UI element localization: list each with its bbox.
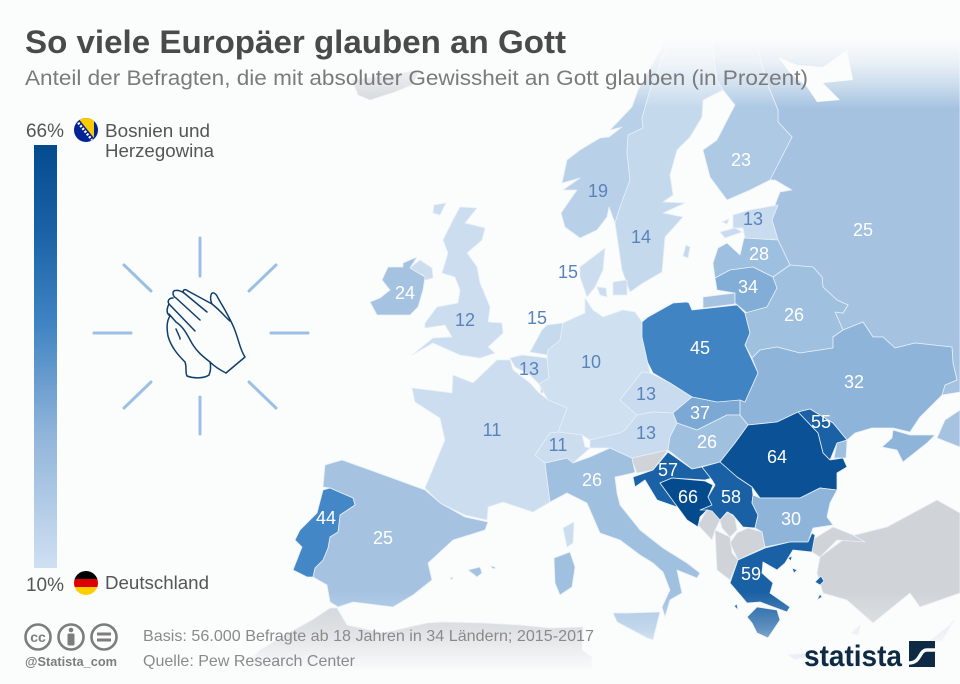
value: Netherlands: 15 [527,308,547,328]
Luxembourg [540,382,547,393]
Bosnia and Herzegovina [660,478,713,527]
Germany [539,298,650,440]
value: Ukraine: 32 [844,372,864,392]
value: Hungary: 26 [697,432,717,452]
legend: minimum value: 10% [26,575,64,596]
White Sea [778,50,853,102]
Bulgaria [752,488,837,547]
Latvia [713,238,790,278]
Sicily [613,612,660,640]
Estonia [720,205,778,240]
value: Germany: 10 [581,352,601,372]
icon: creative commons licence [26,624,116,650]
value: Sweden: 14 [631,227,651,247]
title: So viele Europäer glauben an Gott [25,24,566,60]
logo mark [909,641,935,667]
legend: Bosnia flag icon [74,118,98,142]
non-surveyed land: Turkey [812,500,960,623]
Crete [788,653,807,660]
legend: Bosnia label [105,121,215,161]
icon: no derivatives [92,624,116,650]
value: Switzerland: 11 [549,435,567,455]
subtitle: Anteil der Befragten, die mit absoluter Gewissheit an Gott glauben (in Prozent) [25,66,808,90]
Ukraine: Crimea [882,430,935,462]
value: Russia: 25 [853,220,873,240]
source note: base: Basis: 56.000 Befragte ab 18 Jahren in 34 Ländern; 2015-2017 [143,628,594,645]
non-surveyed land: Iceland [352,70,420,100]
value: Denmark: 15 [558,262,578,282]
value: Italy: 26 [582,470,602,490]
statista logo [804,640,935,673]
legend: Germany flag icon [74,571,98,595]
Slovakia [673,397,740,430]
legend: Bosnia label, line two: Herzegowina [105,141,215,161]
non-surveyed land: Cyprus and small islands [852,620,954,645]
Slovenia [632,450,668,473]
legend: maximum value: 66% [26,121,64,142]
Romania [720,412,847,498]
Gotland [683,245,690,258]
legend: Bosnia label, line one: Bosnien und [105,121,210,141]
France [412,360,567,520]
value: Norway: 19 [588,181,608,201]
value: Bosnia and Herzegovina: 66 [678,487,698,507]
value: Bulgaria: 30 [781,509,801,529]
Belgium [510,355,549,384]
Italy [545,448,700,617]
Balearic Islands [450,566,495,580]
value: Belarus: 26 [784,305,804,325]
Switzerland [535,432,590,463]
top fade of map [0,0,960,108]
Ukraine [740,322,957,440]
value: Belgium: 13 [519,359,539,379]
Greece [730,533,824,638]
legend [26,118,215,596]
value: Romania: 64 [767,447,787,467]
Finland [703,30,792,200]
Lithuania [715,267,777,313]
icon: radiating rays [94,238,308,434]
value: Portugal: 44 [316,508,336,528]
icon: CC: cc [30,629,46,645]
Ireland [370,257,425,315]
Russia [758,30,960,395]
Moldova [798,409,847,460]
value: Poland: 45 [690,338,710,358]
Croatia [633,452,712,527]
icon: attribution [58,624,84,650]
Czech Republic [620,372,692,415]
value: Czech Republic: 13 [636,384,656,404]
map of Europe [250,30,960,672]
value: United Kingdom: 12 [455,310,475,330]
Ukraine: Bessarabia [834,440,847,458]
value: Austria: 13 [636,423,656,443]
Sardinia [554,552,575,595]
twitter handle: @Statista_com [25,655,117,669]
Portugal [293,488,355,577]
North Macedonia [730,528,765,560]
bottom fade of map [0,592,960,672]
Netherlands [530,323,563,355]
Kosovo [720,512,737,537]
Corsica [563,522,574,547]
value: Ireland: 24 [395,283,415,303]
Norway [561,30,673,238]
Austria [590,412,677,458]
Russia: Krasnodar [937,410,960,447]
Sweden [615,30,723,292]
Hungary [668,415,748,469]
value: Croatia: 57 [658,460,678,480]
Montenegro [698,510,720,540]
value: Slovakia: 37 [690,403,710,423]
Poland [642,302,758,402]
Belarus [745,265,848,358]
value: Latvia: 28 [749,244,769,264]
value: Lithuania: 34 [738,277,758,297]
Serbia [700,462,758,528]
legend: Germany label: Deutschland [105,573,209,593]
Denmark [580,248,627,297]
value: France: 11 [483,420,501,440]
country value labels [316,150,873,584]
value: Serbia: 58 [721,487,741,507]
legend: gradient bar [34,145,57,568]
logo wordmark: statista [804,640,902,673]
icon: praying hands [167,290,245,378]
value: Spain: 25 [373,528,393,548]
source note: source: Quelle: Pew Research Center [143,653,356,670]
value: Finland: 23 [731,150,751,170]
non-surveyed land: North Africa [250,608,592,672]
value: Moldova: 55 [811,412,831,432]
Albania [715,530,738,580]
value: Greece: 59 [741,564,761,584]
Russia: Kaliningrad [703,293,735,308]
value: Estonia: 13 [743,209,763,229]
Spain [313,460,488,607]
United Kingdom [410,203,503,358]
